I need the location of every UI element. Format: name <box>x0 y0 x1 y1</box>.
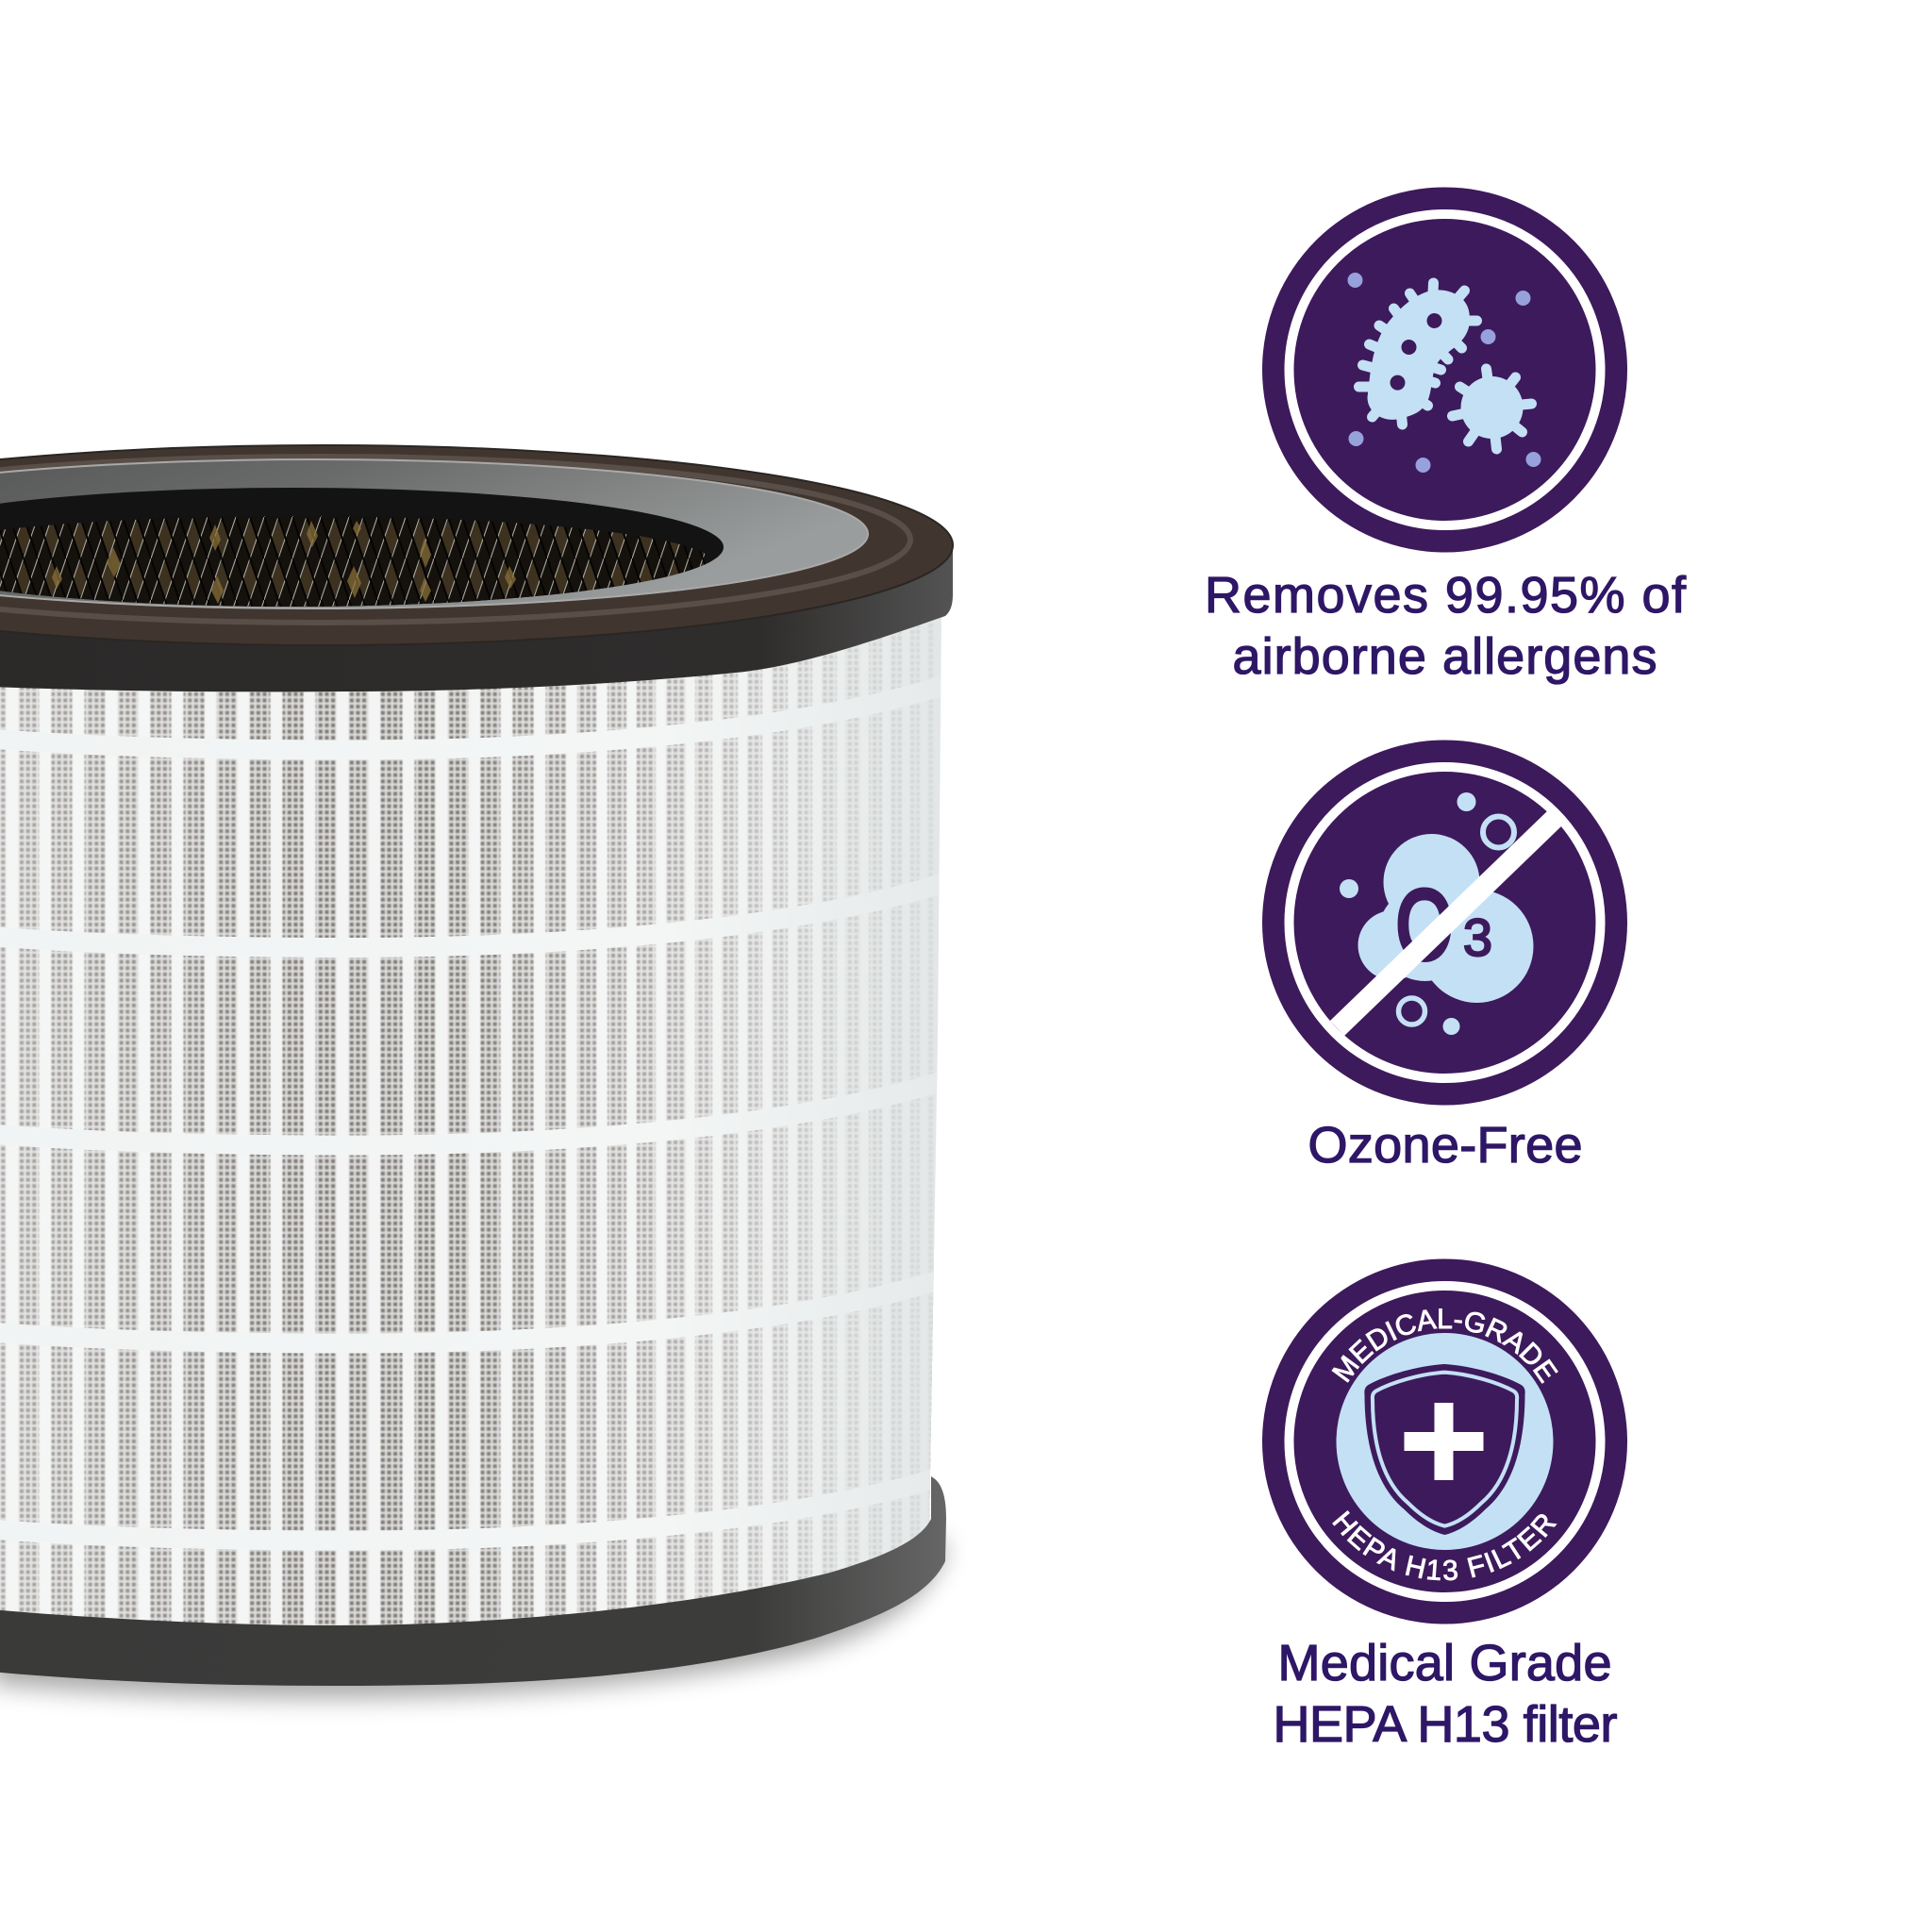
ozone label 3: 3 <box>1463 908 1492 967</box>
bubbles <box>1340 792 1514 1035</box>
curved text: bottom: HEPA H13 FILTER <box>1332 1510 1557 1581</box>
carbon mesh <box>0 516 712 608</box>
white ring <box>1289 767 1600 1078</box>
badge: allergens <box>1205 187 1687 685</box>
badge disc <box>1262 740 1627 1106</box>
light inner disc <box>1336 1333 1553 1550</box>
icon: virus <box>1453 369 1532 449</box>
caption: allergens: airborne allergens <box>1232 628 1657 685</box>
top rim <box>0 445 953 645</box>
caption: medical grade: HEPA H13 filter <box>1274 1696 1618 1753</box>
badge disc <box>1262 187 1627 553</box>
caption: medical grade <box>1274 1635 1618 1753</box>
product: HEPA filter cylinder <box>0 445 953 1698</box>
gray dish <box>0 459 868 608</box>
top band <box>0 542 953 691</box>
floor shadow <box>0 1538 947 1698</box>
badge disc <box>1262 1258 1627 1624</box>
caption: allergens <box>1205 567 1687 685</box>
icon: shield <box>1364 1364 1525 1535</box>
white ring <box>1289 1286 1600 1597</box>
inner wall <box>0 488 724 607</box>
bottom ring <box>0 1476 946 1686</box>
filter body with pleats <box>0 604 953 1679</box>
caption: ozone-free: Ozone-Free <box>1307 1117 1583 1174</box>
caption: allergens: Removes 99.95% of <box>1205 567 1687 624</box>
badge: medical grade HEPA <box>1262 1258 1627 1753</box>
white ring <box>1289 214 1600 525</box>
horizontal straps <box>0 684 948 1541</box>
icon: bacterium <box>1358 283 1477 425</box>
caption: medical grade: Medical Grade <box>1277 1635 1611 1691</box>
ozone label O: O <box>1396 871 1453 980</box>
gold carbon flecks <box>52 521 516 604</box>
particle dots <box>1347 273 1541 473</box>
rim highlight <box>0 457 910 623</box>
badge: ozone-free <box>1262 740 1627 1174</box>
icon: ozone cloud <box>1358 834 1534 1003</box>
curved text: top: MEDICAL-GRADE <box>1332 1308 1558 1384</box>
prohibition slash <box>1338 818 1555 1028</box>
